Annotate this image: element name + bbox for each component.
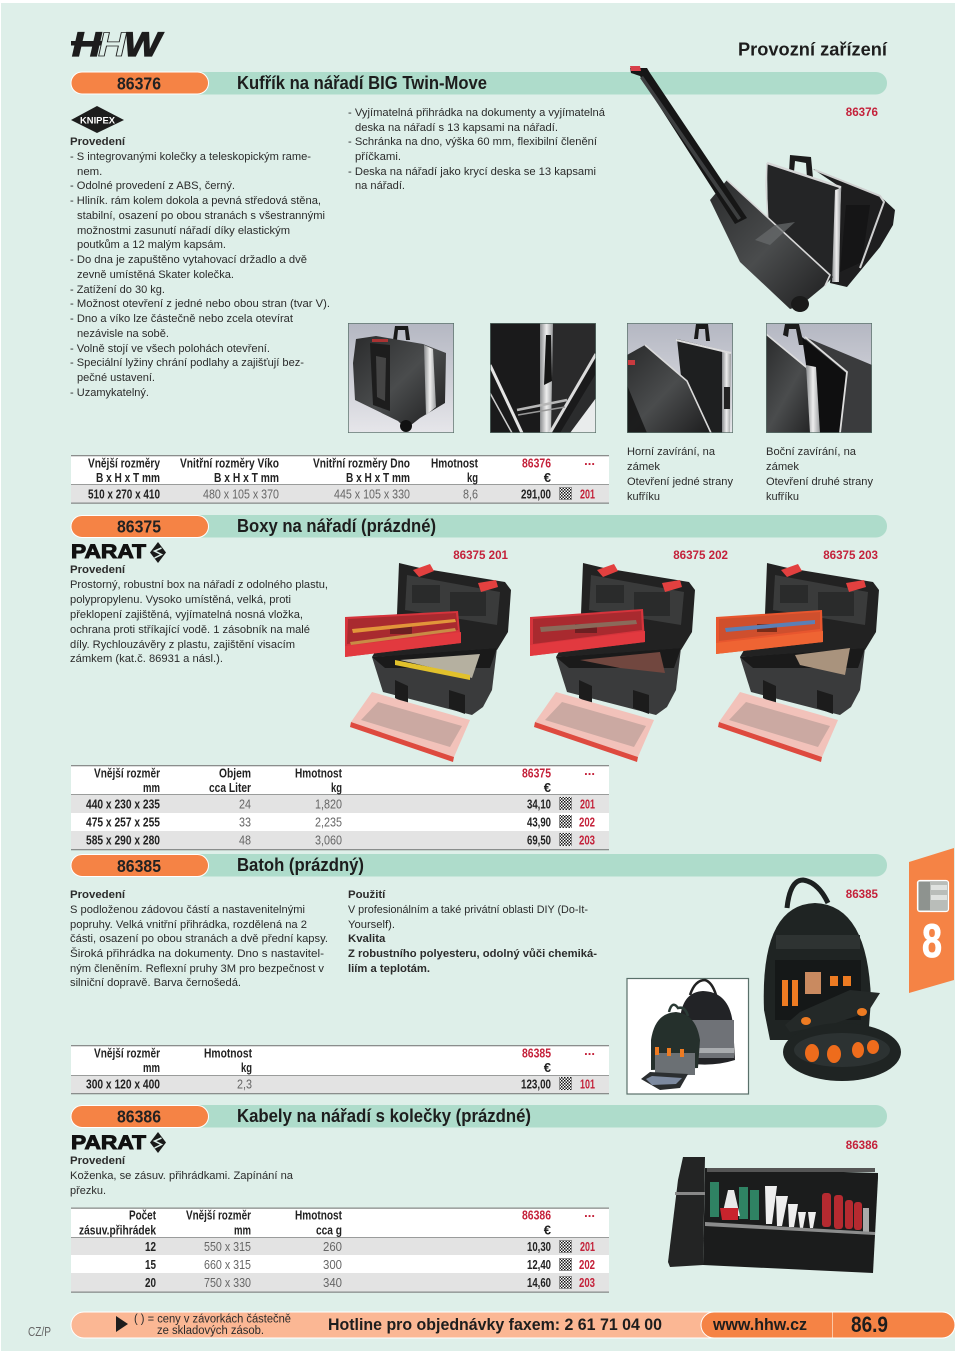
caption: side closing: zámek bbox=[766, 461, 799, 473]
text block: 86385 use and quality: Yourself). bbox=[348, 919, 395, 931]
section header: 86385: 86385 bbox=[117, 856, 161, 876]
text block: 86376 features: pečné ustavení. bbox=[77, 372, 155, 384]
table: 86386: 660 x 315 bbox=[204, 1257, 251, 1272]
photo: case interior detail bbox=[490, 323, 596, 433]
table: 86385: ... bbox=[584, 1043, 595, 1058]
text block: 86375 description: Prostorný, robustní box na nářadí z odolného plastu, bbox=[70, 579, 328, 591]
table: 86376: ... bbox=[584, 453, 595, 468]
product labels: 86375 bbox=[453, 549, 879, 562]
text block: 86376 features: stabilní, osazení po obou stranách s všestrannými bbox=[77, 210, 325, 222]
text block: 86385 description: S podloženou zádovou částí a nastavenitelnými bbox=[70, 904, 305, 916]
logo: HHW: H bbox=[98, 26, 128, 64]
table: 86386: 750 x 330 bbox=[204, 1275, 251, 1290]
section header: 86385 bbox=[71, 854, 887, 876]
table: 86386: Hmotnost bbox=[295, 1208, 343, 1222]
table: 86376: 510 x 270 x 410 bbox=[88, 486, 160, 502]
product labels: 86375: 86375 203 bbox=[823, 549, 879, 562]
table: 86375: 202 bbox=[579, 814, 595, 830]
caption: side closing: Boční zavírání, na bbox=[766, 446, 857, 458]
text block: 86386 description: Koženka, se zásuv. přihrádkami. Zapínání na bbox=[70, 1170, 294, 1182]
table: 86375: 203 bbox=[579, 832, 595, 848]
logo: PARAT bbox=[71, 1132, 166, 1154]
photo: toolbox 203 bbox=[716, 563, 879, 762]
arrow: footer marker bbox=[116, 1316, 128, 1332]
table: 86376 bbox=[71, 453, 609, 504]
table: 86386 bbox=[71, 1205, 609, 1293]
table: 86385 bbox=[71, 1043, 609, 1094]
text block: 86385 description: Široká přihrádka na dokumenty. Dno s nastavitel- bbox=[70, 947, 324, 960]
table: 86386: Počet bbox=[129, 1208, 157, 1222]
heading: Provozní zařízení: Provozní zařízení bbox=[738, 40, 888, 60]
table: 86376: Vnitřní rozměry Dno bbox=[313, 456, 410, 470]
text block: 86376 accessories: deska na nářadí s 13 kapsami na nářadí. bbox=[355, 122, 558, 134]
table: 86376: 86376 bbox=[522, 456, 551, 470]
table: 86376: B x H x T mm bbox=[214, 470, 279, 485]
hotline: Hotline pro objednávky faxem: 2 61 71 04 00 bbox=[328, 1315, 662, 1334]
table: 86386: 550 x 315 bbox=[204, 1239, 251, 1254]
table: 86375: € bbox=[544, 780, 551, 795]
text block: 86375 description: díly. Rychlouzávěry z plastu, zajištění visacím bbox=[70, 639, 295, 651]
table: 86386: 86386 bbox=[522, 1208, 551, 1222]
text block: 86385 use and quality: Použití bbox=[348, 889, 386, 901]
caption: side closing bbox=[766, 446, 873, 503]
text block: 86376 features: - Volně stojí ve všech polohách otevření. bbox=[70, 343, 270, 355]
table: 86385: 86385 bbox=[522, 1046, 551, 1060]
table: 86386: 202 bbox=[579, 1257, 595, 1272]
text block: 86386 description: Provedení bbox=[70, 1155, 126, 1167]
caption: top closing: Horní zavírání, na bbox=[627, 446, 716, 458]
caption: side closing: Otevření druhé strany bbox=[766, 476, 873, 488]
table: 86375: 69,50 bbox=[527, 832, 551, 848]
product labels: 86375: 86375 202 bbox=[673, 549, 728, 562]
section header: 86386 bbox=[71, 1105, 887, 1128]
table: 86386: 300 bbox=[323, 1257, 342, 1272]
text block: 86376 features bbox=[70, 136, 330, 399]
table: 86375: 48 bbox=[239, 832, 251, 848]
section header: 86375: Boxy na nářadí (prázdné) bbox=[237, 515, 436, 536]
caption: top closing: zámek bbox=[627, 461, 660, 473]
table: 86375: 33 bbox=[239, 814, 251, 830]
table: 86375: Hmotnost bbox=[295, 766, 343, 780]
text block: 86386 description: přezku. bbox=[70, 1185, 106, 1197]
table: 86376: Hmotnost bbox=[431, 456, 479, 470]
tab: chapter 8 bbox=[909, 848, 954, 993]
table: 86376: € bbox=[544, 470, 551, 485]
table: 86376: 291,00 bbox=[521, 486, 551, 502]
text block: 86376 features: - Speciální lyžiny chrání podlahy a zajišťují bez- bbox=[70, 357, 304, 369]
table: 86375: 43,90 bbox=[527, 814, 551, 830]
photo: open trolley case bbox=[630, 66, 895, 312]
table: 86386: 14,60 bbox=[527, 1275, 551, 1290]
table: 86375: 24 bbox=[239, 796, 251, 812]
table: 86375: cca Liter bbox=[209, 780, 251, 795]
table: 86386: 201 bbox=[580, 1239, 595, 1254]
text block: 86385 use and quality: Z robustního polyesteru, odolný vůči chemiká- bbox=[348, 948, 597, 960]
text block: 86375 description bbox=[70, 564, 328, 665]
table: 86375: mm bbox=[143, 780, 160, 795]
caption: top closing: kufříku bbox=[627, 491, 660, 503]
table: 86386: 15 bbox=[145, 1257, 156, 1272]
table: 86375: Vnější rozměr bbox=[94, 766, 160, 780]
footer: country code: CZ/P bbox=[28, 1325, 51, 1339]
table: 86376: B x H x T mm bbox=[96, 470, 160, 485]
text block: 86385 use and quality: Kvalita bbox=[348, 933, 386, 945]
table: 86385: 123,00 bbox=[521, 1076, 551, 1092]
section header: 86376: 86376 bbox=[117, 74, 161, 94]
caption: top closing: Otevření jedné strany bbox=[627, 476, 733, 488]
text block: 86376 accessories: na nářadí. bbox=[355, 180, 405, 192]
table: 86375: 440 x 230 x 235 bbox=[86, 796, 160, 812]
text block: 86385 description: silniční dopravě. Barva černošedá. bbox=[70, 977, 241, 989]
footnote: ( ) = ceny v závorkách částečně bbox=[134, 1314, 291, 1326]
photo inset: two backpacks bbox=[627, 978, 748, 1094]
table: 86375: 585 x 290 x 280 bbox=[86, 832, 160, 848]
footnote bbox=[134, 1314, 291, 1337]
product label: 86385: 86385 bbox=[846, 888, 879, 901]
text block: 86385 description: Provedení bbox=[70, 889, 126, 901]
text block: 86385 description: ným členěním. Reflexní pruhy 3M pro bezpečnost v bbox=[70, 963, 324, 975]
text block: 86376 accessories: - Vyjímatelná přihrádka na dokumenty a vyjímatelná bbox=[348, 107, 606, 119]
table: 86386: 12 bbox=[145, 1239, 156, 1254]
table: 86375: Objem bbox=[219, 766, 251, 780]
table: 86385: € bbox=[544, 1060, 551, 1075]
text block: 86376 features: - S integrovanými kolečky a teleskopickým rame- bbox=[70, 151, 311, 163]
logo: PARAT bbox=[71, 542, 166, 563]
text block: 86376 features: - Odolné provedení z ABS, černý. bbox=[70, 180, 235, 192]
table: 86386: cca g bbox=[316, 1222, 342, 1238]
table: 86386: 340 bbox=[323, 1275, 342, 1290]
section header: 86386: Kabely na nářadí s kolečky (prázdné) bbox=[237, 1105, 531, 1126]
tab: chapter 8: 8 bbox=[922, 914, 942, 967]
logo: HHW: H bbox=[72, 26, 103, 64]
table: 86375 bbox=[71, 763, 609, 850]
logo: KNIPEX bbox=[71, 106, 124, 133]
product label: 86376: 86376 bbox=[846, 106, 879, 119]
text block: 86376 features: nezávisle na sobě. bbox=[77, 328, 169, 340]
logo: HHW bbox=[71, 26, 164, 64]
text block: 86385 description: popruhy. Velká vnitřní přihrádka, rozdělená na 2 bbox=[70, 919, 307, 931]
text block: 86376 features: poutkům a 12 malým kapsám. bbox=[77, 239, 226, 251]
table: 86375: 201 bbox=[580, 796, 595, 812]
text block: 86376 features: - Možnost otevření z jedné nebo obou stran (tvar V). bbox=[70, 298, 330, 310]
table: 86376: B x H x T mm bbox=[346, 470, 410, 485]
photo: backpack open bbox=[764, 880, 901, 1081]
table: 86386: mm bbox=[234, 1222, 251, 1238]
table: 86386: 260 bbox=[323, 1239, 342, 1254]
photo: toolbox 201 bbox=[345, 563, 511, 762]
photo: case opened on other side bbox=[766, 323, 872, 433]
text block: 86376 features: - Dno a víko lze částečně nebo zcela otevírat bbox=[70, 313, 294, 325]
table: 86386: zásuv.přihrádek bbox=[79, 1222, 157, 1238]
photo: case closed bbox=[348, 323, 454, 433]
table: 86375: 3,060 bbox=[315, 832, 342, 848]
table: 86385: mm bbox=[143, 1060, 160, 1075]
table: 86385: 300 x 120 x 400 bbox=[86, 1076, 160, 1092]
table: 86385: 2,3 bbox=[237, 1076, 252, 1092]
text block: 86385 use and quality: V profesionálním a také privátní oblasti DIY (Do-It- bbox=[348, 904, 588, 916]
caption: top closing bbox=[627, 446, 733, 503]
website: www.hhw.cz bbox=[712, 1316, 807, 1334]
section header: 86386: 86386 bbox=[117, 1106, 161, 1126]
product label: 86386: 86386 bbox=[846, 1139, 879, 1152]
table: 86385: Hmotnost bbox=[204, 1046, 253, 1060]
table: 86375: 34,10 bbox=[527, 796, 551, 812]
text block: 86385 description bbox=[70, 889, 328, 989]
table: 86386: 10,30 bbox=[527, 1239, 551, 1254]
text block: 86376 accessories: příčkami. bbox=[355, 151, 401, 163]
text block: 86386 description bbox=[70, 1155, 294, 1197]
text block: 86375 description: Provedení bbox=[70, 564, 126, 576]
product labels: 86375: 86375 201 bbox=[453, 549, 509, 562]
table: 86386: 12,40 bbox=[527, 1257, 551, 1272]
table: 86386: € bbox=[544, 1222, 551, 1238]
text block: 86376 features: možnostmi zasunutí nářadí díky elastickým bbox=[77, 225, 290, 237]
table: 86376: Vnitřní rozměry Víko bbox=[180, 456, 279, 470]
table: 86386: ... bbox=[584, 1205, 595, 1220]
text block: 86376 accessories: - Deska na nářadí jako krycí deska se 13 kapsami bbox=[348, 166, 596, 178]
table: 86375: 475 x 257 x 255 bbox=[86, 814, 160, 830]
logo: KNIPEX: KNIPEX bbox=[80, 115, 115, 125]
text block: 86385 use and quality bbox=[348, 889, 597, 975]
text block: 86376 features: nem. bbox=[77, 166, 102, 178]
section header: 86376: Kufřík na nářadí BIG Twin-Move bbox=[237, 72, 487, 93]
table: 86376: 8,6 bbox=[463, 486, 478, 502]
photo: case opened on one side bbox=[627, 323, 733, 433]
logo: PARAT: PARAT bbox=[71, 542, 146, 563]
table: 86385: kg bbox=[241, 1060, 252, 1075]
footnote: ze skladových zásob. bbox=[157, 1325, 264, 1337]
text block: 86376 accessories bbox=[348, 107, 606, 192]
text block: 86385 description: části, osazení po obou stranách a dvě přední kapsy. bbox=[70, 933, 328, 945]
table: 86376: 201 bbox=[580, 486, 595, 502]
logo: HHW: W bbox=[124, 26, 164, 64]
table: 86386: 203 bbox=[579, 1275, 595, 1290]
section header: 86375 bbox=[71, 515, 887, 538]
text block: 86375 description: zámkem (kat.č. 86931 a násl.). bbox=[70, 653, 223, 665]
photo: tool roll bbox=[668, 1157, 878, 1273]
logo: PARAT: PARAT bbox=[71, 1133, 146, 1154]
footer bar bbox=[71, 1312, 955, 1338]
table: 86376: 445 x 105 x 330 bbox=[334, 486, 410, 502]
text block: 86376 features: - Uzamykatelný. bbox=[70, 387, 149, 399]
text block: 86376 features: zevně umístěná Skater kolečka. bbox=[77, 269, 234, 281]
table: 86376: 480 x 105 x 370 bbox=[203, 486, 279, 502]
caption: side closing: kufříku bbox=[766, 491, 799, 503]
table: 86385: 101 bbox=[580, 1076, 595, 1092]
page number: 86.9 bbox=[851, 1312, 888, 1337]
table: 86376: kg bbox=[467, 470, 478, 485]
table: 86375: ... bbox=[584, 763, 595, 778]
table: 86375: 2,235 bbox=[315, 814, 342, 830]
text block: 86385 use and quality: liím a teplotám. bbox=[348, 963, 430, 975]
section header: 86385: Batoh (prázdný) bbox=[237, 854, 364, 875]
table: 86375: 1,820 bbox=[315, 796, 342, 812]
text block: 86375 description: ochrana proti stříkající vodě. 1 zásobník na malé bbox=[70, 624, 310, 636]
text block: 86375 description: překlopení zajištěná, vyjímatelná nosná vložka, bbox=[70, 609, 303, 621]
text block: 86376 accessories: - Schránka na dno, výška 60 mm, flexibilní členění bbox=[348, 136, 598, 148]
table: 86376: Vnější rozměry bbox=[88, 456, 161, 470]
text block: 86376 features: - Zatížení do 30 kg. bbox=[70, 284, 165, 296]
text block: 86375 description: polypropylenu. Vysoko umístěná, velká, proti bbox=[70, 594, 291, 606]
text block: 86376 features: - Hliník. rám kolem dokola a pevná středová stěna, bbox=[70, 195, 321, 207]
photo: toolbox 202 bbox=[530, 563, 695, 762]
table: 86375: kg bbox=[331, 780, 342, 795]
table: 86375: 86375 bbox=[522, 766, 551, 780]
text block: 86376 features: Provedení bbox=[70, 136, 126, 148]
text block: 86376 features: - Do dna je zapuštěno vytahovací držadlo a dvě bbox=[70, 254, 307, 266]
table: 86386: 20 bbox=[145, 1275, 156, 1290]
table: 86386: Vnější rozměr bbox=[186, 1208, 251, 1222]
section header: 86376 bbox=[71, 72, 887, 94]
table: 86385: Vnější rozměr bbox=[94, 1046, 160, 1060]
section header: 86375: 86375 bbox=[117, 516, 161, 536]
